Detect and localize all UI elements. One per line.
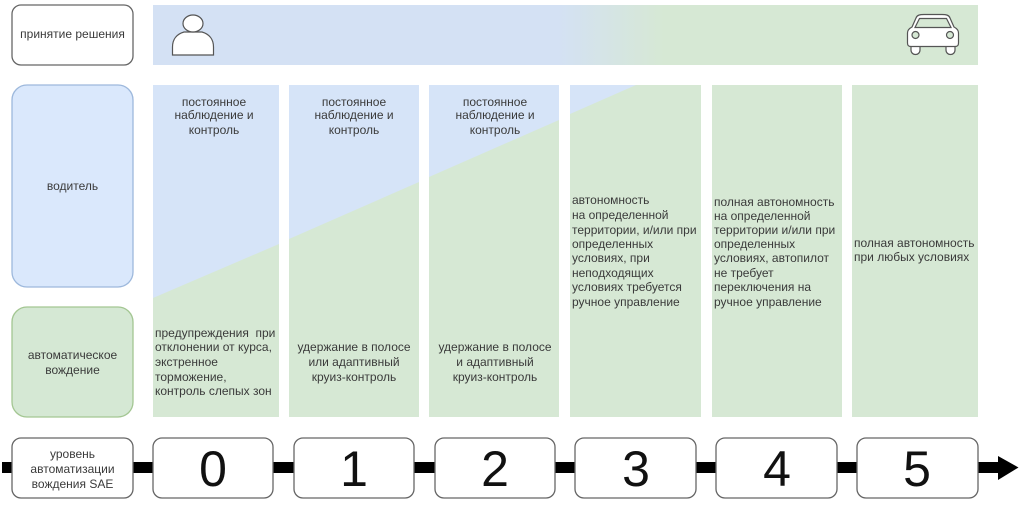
icon: person: [172, 15, 214, 55]
level 1 box: 1: [340, 441, 368, 497]
panel: level 2: контроль: [470, 123, 520, 137]
SAE level label box: вождения SAE: [32, 477, 113, 491]
panel: level 4: полная автономность: [714, 195, 834, 209]
panel: level 4: условиях, автопилот: [714, 251, 829, 265]
level 0 box: 0: [199, 441, 227, 497]
level 2 box: 2: [481, 441, 509, 497]
panel: level 1: удержание в полосе: [297, 340, 411, 354]
panel: level 0: предупреждения при: [155, 326, 275, 340]
panel: level 2: и адаптивный: [456, 355, 534, 369]
panel: level 1: наблюдение и: [314, 108, 394, 122]
panel: level 3: условиях требуется: [572, 280, 682, 294]
automated driving label box: [12, 307, 133, 417]
panel: level 3: ручное управление: [572, 295, 680, 309]
level 0 box: [153, 438, 273, 498]
panel: level 0: контроль слепых зон: [155, 384, 272, 398]
panel: level 1: круиз-контроль: [312, 370, 396, 384]
panel: level 4: не требует: [714, 266, 774, 280]
panel: level 1: постоянное: [322, 95, 386, 109]
panel: level 4: определенных: [714, 237, 795, 251]
panel: level 4: на определенной: [714, 209, 810, 223]
panel: level 5: полная автономность: [854, 236, 974, 250]
automated driving label box: вождение: [45, 363, 100, 377]
icon: car: [908, 14, 958, 54]
panel: level 5: [852, 85, 978, 417]
SAE level label box: автоматизации: [30, 462, 115, 476]
SAE level label box: уровень: [50, 447, 95, 461]
panel: level 3: [570, 85, 701, 417]
panel: level 5: при любых условиях: [854, 250, 969, 264]
arrow: SAE level axis: [2, 456, 1018, 480]
driver label box: [12, 85, 133, 287]
SAE level label box: [12, 438, 133, 498]
decision label box: принятие решения: [20, 27, 125, 41]
level 2 box: [435, 438, 555, 498]
panel: level 1: или адаптивный: [308, 355, 400, 369]
panel: level 3: определенных: [572, 237, 653, 251]
panel: level 3: автономность: [572, 193, 649, 207]
panel: level 1: контроль: [329, 123, 379, 137]
panel: level 4: территории и/или при: [714, 223, 835, 237]
panel: level 3: на определенной: [572, 208, 668, 222]
decision label box: [12, 5, 133, 65]
panel: level 0: отклонении от курса,: [155, 340, 272, 354]
panel: level 0: экстренное: [155, 355, 218, 369]
panel: level 3: условиях, при: [572, 251, 650, 265]
panel: level 0: наблюдение и: [174, 108, 254, 122]
level 1 box: [294, 438, 414, 498]
panel: level 1: [289, 85, 419, 417]
level 3 box: [575, 438, 696, 498]
level 5 box: 5: [903, 441, 931, 497]
panel: level 0: торможение,: [155, 370, 227, 384]
panel: level 4: переключения на: [714, 280, 811, 294]
panel: level 0: [153, 85, 279, 417]
panel: level 2: удержание в полосе: [438, 340, 552, 354]
level 3 box: 3: [622, 441, 650, 497]
panel: level 2: постоянное: [463, 95, 527, 109]
panel: level 0: контроль: [189, 123, 239, 137]
decision gradient bar: [153, 5, 978, 65]
level 4 box: [716, 438, 837, 498]
panel: level 2: наблюдение и: [455, 108, 535, 122]
panel: level 4: ручное управление: [714, 295, 822, 309]
level 4 box: 4: [763, 441, 791, 497]
automated driving label box: автоматическое: [28, 348, 117, 362]
panel: level 3: территории, и/или при: [572, 223, 697, 237]
panel: level 3: неподходящих: [572, 266, 654, 280]
panel: level 2: круиз-контроль: [453, 370, 537, 384]
level 5 box: [857, 438, 978, 498]
panel: level 4: [712, 85, 842, 417]
panel: level 2: [429, 85, 559, 417]
panel: level 0: постоянное: [182, 95, 246, 109]
driver label box: водитель: [47, 179, 98, 193]
